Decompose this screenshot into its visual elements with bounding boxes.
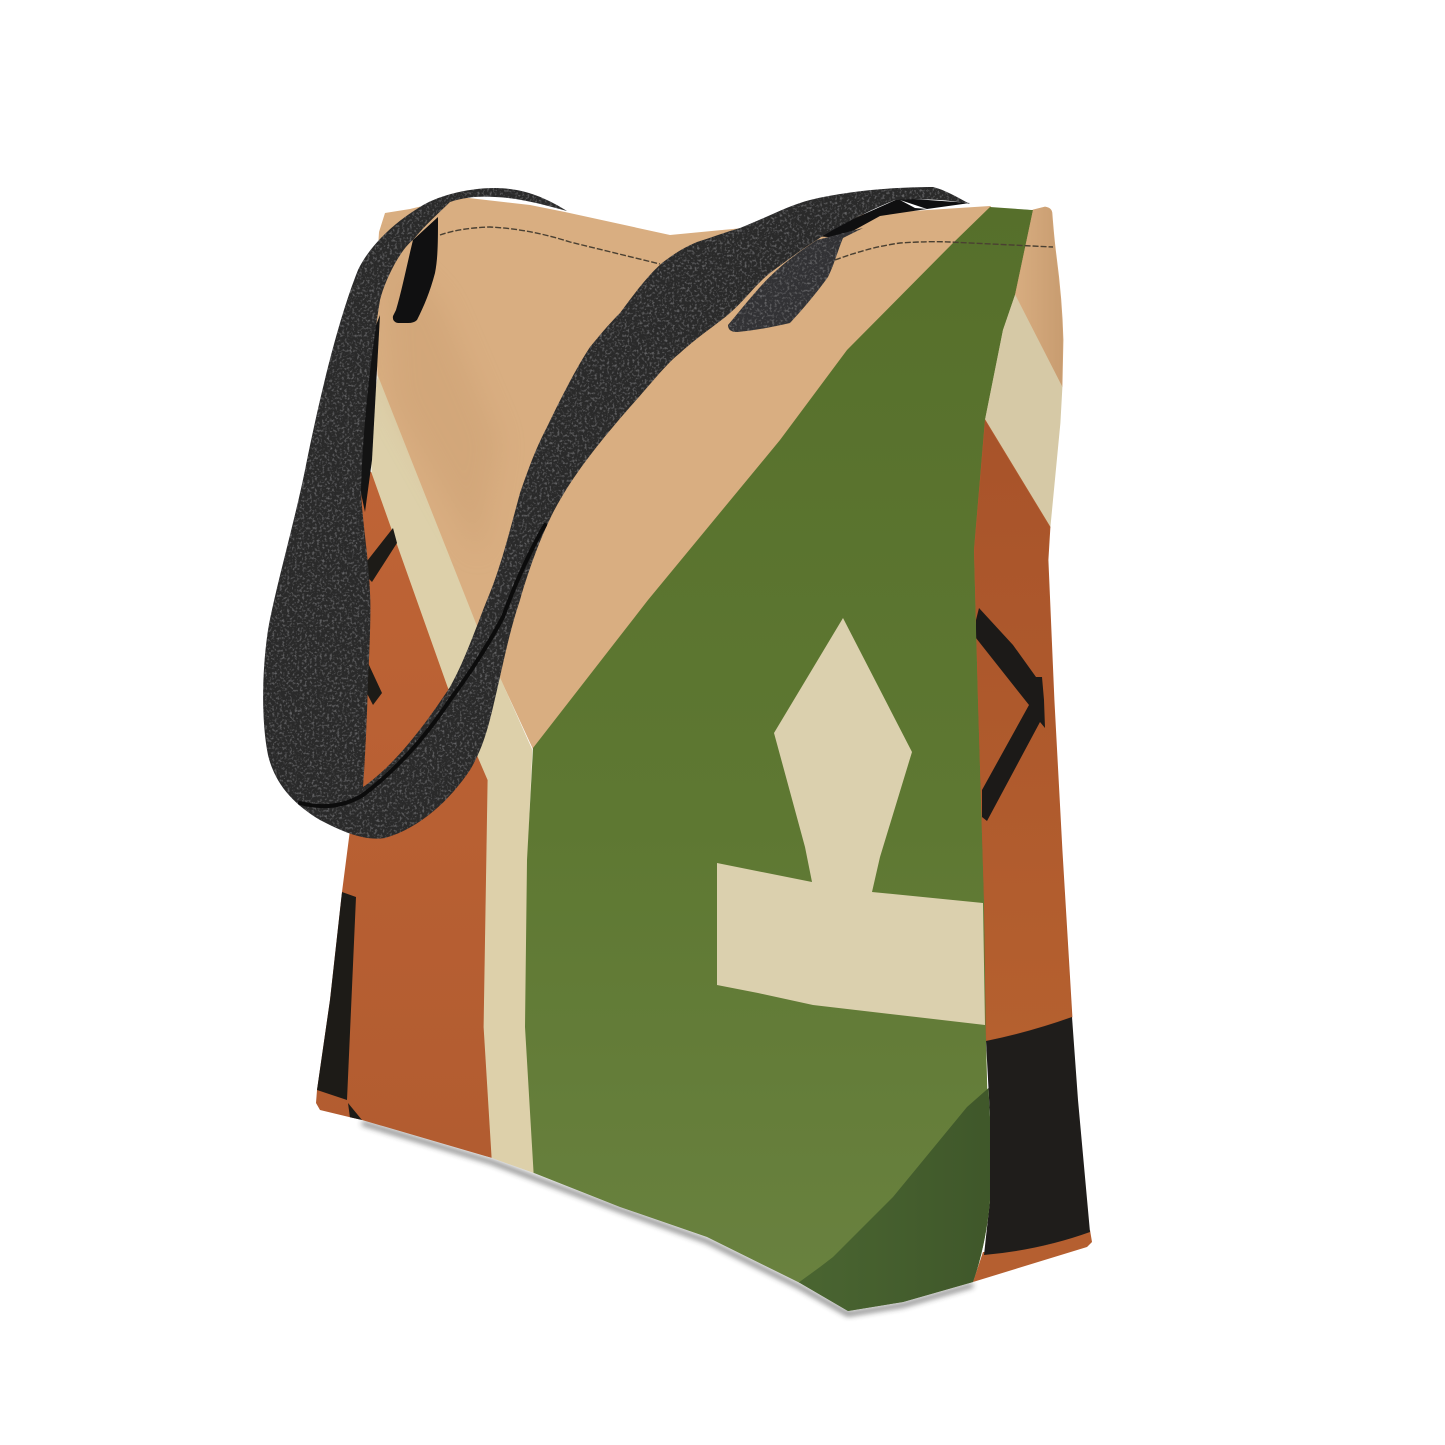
strap: shoulder handle <box>263 187 970 839</box>
gusset: black cross <box>976 608 1045 821</box>
front: black corner triangle <box>348 1103 362 1120</box>
ground shadow <box>362 1123 973 1314</box>
front: tan top field <box>370 190 1000 748</box>
front: black cross lower stroke <box>368 664 382 705</box>
front: orange left field <box>316 472 492 1158</box>
front: green field <box>525 207 1033 1320</box>
front: black block lower left <box>317 892 356 1100</box>
gusset: orange base <box>973 1230 1092 1282</box>
panel: front of bag <box>300 190 1033 1320</box>
strap tab: right <box>728 228 863 332</box>
gusset: orange panel <box>974 420 1072 1041</box>
panel: side gusset <box>973 207 1092 1282</box>
front: dark green corner <box>798 1085 995 1320</box>
gusset: black block <box>984 1017 1090 1255</box>
gusset: cream stripe <box>985 295 1062 527</box>
strap: inner dark side <box>356 315 380 512</box>
emblem: cream kite and bar <box>717 618 985 1025</box>
strap tab: left <box>393 217 438 323</box>
stitching: top hem <box>440 227 1053 264</box>
product illustration: tote bag <box>263 187 1092 1320</box>
gusset: tan top <box>1015 207 1063 387</box>
strap loop: back underside <box>815 198 970 238</box>
front: soft fold shading <box>380 240 500 560</box>
white gap under strap <box>900 200 927 209</box>
strap: fold crease <box>300 525 545 806</box>
front: black cross upper stroke <box>368 528 397 582</box>
front: cream stripe <box>370 377 534 1173</box>
